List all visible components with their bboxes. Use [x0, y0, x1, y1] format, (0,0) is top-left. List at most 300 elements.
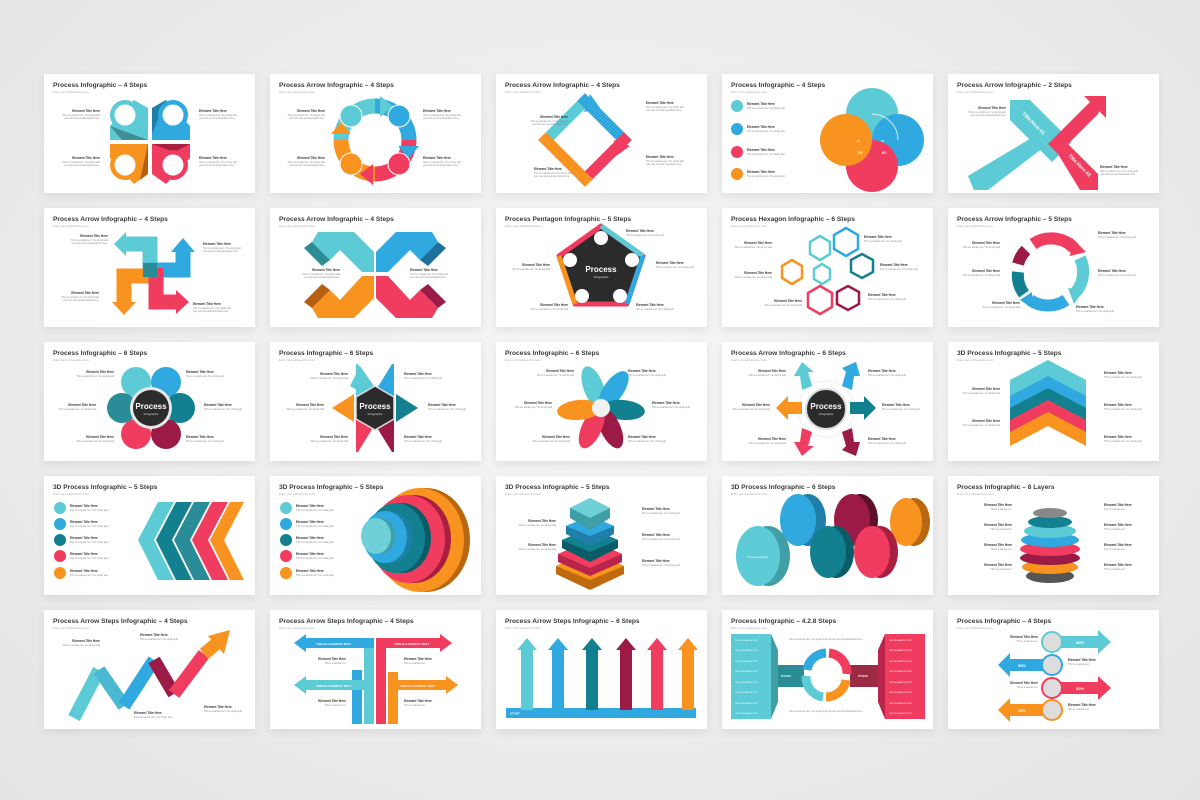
card 21: zigzag arrow steps: This is a sample text. You simply add	[134, 716, 172, 719]
card 1: Process Infographic 4 Steps: Element Title Here	[199, 109, 227, 113]
card 11: Process 6 steps circle: Element Title Here	[186, 370, 214, 374]
card 1: Process Infographic 4 Steps: your own text and description here.	[64, 117, 100, 120]
card 24: 4.2.8 steps: Process Infographic – 4.2.8 Steps	[731, 618, 837, 625]
card 12: hexagon with arrows: Element Title Here	[320, 372, 348, 376]
card 9: hexagons: This is a sample text. You simply add	[734, 246, 773, 249]
card 20: 8 layers: Process Infographic – 8 Layers	[957, 484, 1055, 491]
card 12: hexagon with arrows: This is a sample text. You simply add	[404, 440, 442, 443]
card 16: 3D chevrons list: Element Title Here	[70, 504, 98, 508]
card 4: Process Infographic 4 Steps (flower): Element Title Here	[747, 102, 775, 106]
card 11: Process 6 steps circle: Element Title Here	[68, 403, 96, 407]
card 7: X arrows	[270, 208, 481, 327]
card 2: Process Arrow Infographic 4 Steps (ring): Element Title Here	[297, 156, 325, 160]
card 20: 8 layers: This is a sample text.	[990, 568, 1012, 571]
card 24: 4.2.8 steps: TITLE02	[858, 675, 868, 678]
card 25: 4 steps percentages: 10%	[1018, 708, 1026, 713]
card 22: arrow steps 4	[270, 610, 481, 729]
card 21: zigzag arrow steps	[44, 610, 255, 729]
card 13: flower petals: Element Title Here	[524, 401, 552, 405]
card 19: 3D cylinders: This is a sample text.	[747, 556, 769, 559]
card 10: circular 5 arrows	[948, 208, 1159, 327]
card 13: flower petals: Element Title Here	[628, 435, 656, 439]
card 14: dark circle with arrows: Element Title Here	[882, 403, 910, 407]
card 13: flower petals: This is a sample text. You simply add	[628, 440, 666, 443]
card 10: circular 5 arrows: Process Arrow Infographic – 5 Steps	[957, 216, 1072, 223]
card 8: pentagon: Element Title Here	[522, 263, 550, 267]
card 12: hexagon with arrows: Element Title Here	[404, 372, 432, 376]
card 5: Process Arrow Infographic 2 Steps: Title Here #2	[1067, 153, 1092, 179]
card 7: X arrows: your own text and description here.	[410, 276, 446, 279]
card 14: dark circle with arrows: Process	[810, 402, 842, 411]
card 15: 3D stacked chevrons: This is a sample text. You simply add	[1104, 376, 1142, 379]
card 1: Process Infographic 4 Steps: Element Title Here	[72, 109, 100, 113]
card 16: 3D chevrons list: 3D Process Infographic – 5 Steps	[53, 484, 158, 491]
card 3: Process Arrow Infographic 4 Steps (diamond): your own text and description here.	[534, 175, 570, 178]
card 24: 4.2.8 steps: THIS IS A SAMPLE TEXT	[889, 649, 913, 652]
card 22: arrow steps 4: This is a sample text.	[324, 704, 346, 707]
card 15: 3D stacked chevrons: This is a sample text. You simply add	[962, 392, 1001, 395]
card 18: stacked squares 3D: 3D Process Infographic – 5 Steps	[505, 484, 610, 491]
card 11: Process 6 steps circle	[44, 342, 255, 461]
card 20: 8 layers: Element Title Here	[1104, 563, 1132, 567]
card 3: Process Arrow Infographic 4 Steps (diamond): Element Title Here	[646, 155, 674, 159]
card 14: dark circle with arrows	[722, 342, 933, 461]
card 10: circular 5 arrows: This is a sample text. You simply add	[1098, 236, 1136, 239]
card 2: Process Arrow Infographic 4 Steps (ring): Enter your subhead line here	[279, 90, 315, 94]
card 11: Process 6 steps circle: This is a sample text. You simply add	[186, 375, 224, 378]
card 16: 3D chevrons list: This is a sample text. You simply add	[70, 541, 108, 544]
card 17: concentric 3D circles: Element Title Here	[296, 536, 324, 540]
card 10: circular 5 arrows: This is a sample text. You simply add	[962, 246, 1001, 249]
card 3: Process Arrow Infographic 4 Steps (diamond): This is a sample text. You simply add	[646, 106, 684, 109]
card 5: Process Arrow Infographic 2 Steps: This is a sample text. You simply add	[968, 111, 1007, 114]
card 1: Process Infographic 4 Steps: This is a sample text. You simply add	[199, 161, 237, 164]
card 8: pentagon: Infographic	[594, 275, 609, 279]
card 8: pentagon	[496, 208, 707, 327]
card 12: hexagon with arrows: Process	[359, 402, 391, 411]
card 1: Process Infographic 4 Steps: Element Title Here	[72, 156, 100, 160]
card 8: pentagon: Element Title Here	[626, 229, 654, 233]
card 16: 3D chevrons list: This is a sample text. You simply add	[70, 574, 108, 577]
card 12: hexagon with arrows: Element Title Here	[404, 435, 432, 439]
card 14: dark circle with arrows: Process Arrow Infographic – 6 Steps	[731, 350, 846, 357]
card 22: arrow steps 4: Process Arrow Steps Infographic – 4 Steps	[279, 618, 414, 625]
card 9: hexagons: Element Title Here	[864, 235, 892, 239]
card 13: flower petals	[496, 342, 707, 461]
card 5: Process Arrow Infographic 2 Steps: your own text and description here.	[970, 114, 1006, 117]
card 22: arrow steps 4: THIS IS A SAMPLE TEXT	[316, 642, 351, 646]
card 14: dark circle with arrows: This is a sample text. You simply add	[868, 374, 906, 377]
card 7: X arrows: Process Arrow Infographic – 4 Steps	[279, 216, 394, 223]
card 24: 4.2.8 steps: THIS IS A SAMPLE TEXT	[735, 681, 759, 684]
card 25: 4 steps percentages: This is a sample text.	[1068, 663, 1090, 666]
card 6: pinwheel arrows: Element Title Here	[80, 234, 108, 238]
card 18: stacked squares 3D: This is a sample text. You simply add	[518, 548, 557, 551]
card 4: Process Infographic 4 Steps (flower)	[722, 74, 933, 193]
card 13: flower petals: This is a sample text. You simply add	[536, 374, 575, 377]
card 15: 3D stacked chevrons: Enter your subhead line here	[957, 358, 993, 362]
card 4: Process Infographic 4 Steps (flower): Process Infographic – 4 Steps	[731, 82, 826, 89]
card 2: Process Arrow Infographic 4 Steps (ring): This is a sample text. You simply add	[287, 114, 326, 117]
card 5: Process Arrow Infographic 2 Steps: Element Title Here	[978, 106, 1006, 110]
card 24: 4.2.8 steps: THIS IS A SAMPLE TEXT	[889, 712, 913, 715]
card 9: hexagons: This is a sample text. You simply add	[880, 268, 918, 271]
card 7: X arrows: Element Title Here	[410, 268, 438, 272]
card 12: hexagon with arrows: This is a sample text. You simply add	[286, 408, 325, 411]
card 19: 3D cylinders	[722, 476, 933, 595]
card 19: 3D cylinders: 3D Process Infographic – 6 Steps	[731, 484, 836, 491]
card 18: stacked squares 3D: Element Title Here	[528, 519, 556, 523]
card 17: concentric 3D circles: 3D Process Infographic – 5 Steps	[279, 484, 384, 491]
card 2: Process Arrow Infographic 4 Steps (ring)	[270, 74, 481, 193]
card 10: circular 5 arrows: Element Title Here	[1076, 305, 1104, 309]
card 18: stacked squares 3D: Enter your subhead line here	[505, 492, 541, 496]
card 17: concentric 3D circles: Enter your subhead line here	[279, 492, 315, 496]
card 2: Process Arrow Infographic 4 Steps (ring): This is a sample text. You simply add	[423, 161, 461, 164]
card 17: concentric 3D circles: Element Title Here	[296, 504, 324, 508]
card 23: vertical arrows 6: START	[510, 712, 520, 716]
card 25: 4 steps percentages: Element Title Here	[1010, 635, 1038, 639]
card 8: pentagon: This is a sample text. You simply add	[626, 234, 664, 237]
card 6: pinwheel arrows: your own text and description here.	[193, 310, 229, 313]
card 2: Process Arrow Infographic 4 Steps (ring): This is a sample text. You simply add	[423, 114, 461, 117]
card 18: stacked squares 3D: This is a sample text. You simply add	[642, 538, 680, 541]
card 24: 4.2.8 steps: THIS IS A SAMPLE TEXT	[735, 649, 759, 652]
card 6: pinwheel arrows: your own text and description here.	[63, 299, 99, 302]
card 4: Process Infographic 4 Steps (flower): 03	[858, 150, 863, 155]
card 15: 3D stacked chevrons	[948, 342, 1159, 461]
card 11: Process 6 steps circle: Element Title Here	[186, 435, 214, 439]
card 9: hexagons: Element Title Here	[744, 241, 772, 245]
card 24: 4.2.8 steps: THIS IS A SAMPLE TEXT	[889, 670, 913, 673]
card 22: arrow steps 4: Element Title Here	[404, 657, 432, 661]
card 6: pinwheel arrows: This is a sample text. You simply add	[193, 307, 231, 310]
card 24: 4.2.8 steps: THIS IS A SAMPLE TEXT	[735, 660, 759, 663]
card 22: arrow steps 4: Enter your subhead line here	[279, 626, 315, 630]
card 15: 3D stacked chevrons: Element Title Here	[972, 387, 1000, 391]
card 25: 4 steps percentages: Element Title Here	[1068, 658, 1096, 662]
card 4: Process Infographic 4 Steps (flower): This is a sample text. You simply add	[747, 175, 785, 178]
card 2: Process Arrow Infographic 4 Steps (ring): Element Title Here	[423, 109, 451, 113]
card 7: X arrows: your own text and description here.	[304, 276, 340, 279]
card 9: hexagons: This is a sample text. You simply add	[764, 304, 803, 307]
card 20: 8 layers: Element Title Here	[984, 563, 1012, 567]
card 6: pinwheel arrows: Enter your subhead line here	[53, 224, 89, 228]
card 2: Process Arrow Infographic 4 Steps (ring): This is a sample text. You simply add	[287, 161, 326, 164]
card 10: circular 5 arrows: This is a sample text. You simply add	[1098, 274, 1136, 277]
card 9: hexagons: Element Title Here	[774, 299, 802, 303]
card 25: 4 steps percentages: 80%	[1076, 640, 1084, 645]
card 24: 4.2.8 steps: THIS IS A SAMPLE TEXT	[889, 702, 913, 705]
card 13: flower petals: This is a sample text. You simply add	[628, 374, 666, 377]
card 2: Process Arrow Infographic 4 Steps (ring): Element Title Here	[423, 156, 451, 160]
card 20: 8 layers: This is a sample text.	[990, 508, 1012, 511]
card 5: Process Arrow Infographic 2 Steps: Title Here #1	[1021, 111, 1046, 137]
card 21: zigzag arrow steps: Element Title Here	[204, 705, 232, 709]
card 24: 4.2.8 steps: THIS IS A SAMPLE TEXT	[735, 670, 759, 673]
card 9: hexagons: Element Title Here	[880, 263, 908, 267]
card 17: concentric 3D circles: This is a sample text. You simply add	[296, 509, 334, 512]
card 13: flower petals: Enter your subhead line here	[505, 358, 541, 362]
card 21: zigzag arrow steps: Element Title Here	[72, 639, 100, 643]
card 15: 3D stacked chevrons: Element Title Here	[972, 419, 1000, 423]
card 24: 4.2.8 steps: This is a sample text. You simply add your own text and description here.	[789, 710, 863, 713]
card 18: stacked squares 3D: Element Title Here	[642, 507, 670, 511]
card 4: Process Infographic 4 Steps (flower): 01	[881, 139, 885, 143]
card 5: Process Arrow Infographic 2 Steps: Enter your subhead line here	[957, 90, 993, 94]
card 18: stacked squares 3D: This is a sample text. You simply add	[642, 512, 680, 515]
card 12: hexagon with arrows: Process Infographic – 6 Steps	[279, 350, 374, 357]
card 5: Process Arrow Infographic 2 Steps: Element Title Here	[1100, 165, 1128, 169]
card 24: 4.2.8 steps: THIS IS A SAMPLE TEXT	[889, 691, 913, 694]
card 2: Process Arrow Infographic 4 Steps (ring): your own text and description here.	[289, 117, 325, 120]
card 2: Process Arrow Infographic 4 Steps (ring): your own text and description here.	[289, 164, 325, 167]
card 13: flower petals: Element Title Here	[652, 401, 680, 405]
card 24: 4.2.8 steps: THIS IS A SAMPLE TEXT	[735, 691, 759, 694]
card 17: concentric 3D circles	[270, 476, 481, 595]
card 12: hexagon with arrows: Element Title Here	[296, 403, 324, 407]
card 11: Process 6 steps circle: This is a sample text. You simply add	[76, 440, 115, 443]
card 10: circular 5 arrows: This is a sample text. You simply add	[1076, 310, 1114, 313]
card 5: Process Arrow Infographic 2 Steps: Process Arrow Infographic – 2 Steps	[957, 82, 1072, 89]
card 16: 3D chevrons list	[44, 476, 255, 595]
card 11: Process 6 steps circle: Enter your subhead line here	[53, 358, 89, 362]
card 12: hexagon with arrows: Infographic	[368, 412, 383, 416]
card 15: 3D stacked chevrons: Element Title Here	[1104, 371, 1132, 375]
card 11: Process 6 steps circle: Element Title Here	[204, 403, 232, 407]
card 9: hexagons: Process Hexagon Infographic – 6 Steps	[731, 216, 855, 223]
card 18: stacked squares 3D: Element Title Here	[642, 533, 670, 537]
card 22: arrow steps 4: Element Title Here	[404, 699, 432, 703]
card 18: stacked squares 3D: Element Title Here	[528, 543, 556, 547]
card 2: Process Arrow Infographic 4 Steps (ring): Process Arrow Infographic – 4 Steps	[279, 82, 394, 89]
card 12: hexagon with arrows: This is a sample text. You simply add	[404, 377, 442, 380]
card 20: 8 layers: Element Title Here	[1104, 503, 1132, 507]
card 10: circular 5 arrows: This is a sample text. You simply add	[962, 274, 1001, 277]
card 4: Process Infographic 4 Steps (flower): Element Title Here	[747, 148, 775, 152]
card 24: 4.2.8 steps: THIS IS A SAMPLE TEXT	[889, 639, 913, 642]
card 1: Process Infographic 4 Steps: This is a sample text. You simply add	[62, 161, 101, 164]
card 24: 4.2.8 steps: THIS IS A SAMPLE TEXT	[889, 681, 913, 684]
card 14: dark circle with arrows: Element Title Here	[868, 369, 896, 373]
card 9: hexagons	[722, 208, 933, 327]
card 14: dark circle with arrows: This is a sample text. You simply add	[748, 374, 787, 377]
card 17: concentric 3D circles: This is a sample text. You simply add	[296, 525, 334, 528]
card 3: Process Arrow Infographic 4 Steps (diamond): Enter your subhead line here	[505, 90, 541, 94]
card 17: concentric 3D circles: Element Title Here	[296, 520, 324, 524]
card 20: 8 layers: This is a sample text.	[990, 548, 1012, 551]
card 4: Process Infographic 4 Steps (flower): 04	[857, 139, 861, 143]
card 22: arrow steps 4: This is a sample text.	[404, 662, 426, 665]
card 24: 4.2.8 steps: THIS IS A SAMPLE TEXT	[889, 660, 913, 663]
card 22: arrow steps 4: THIS IS A SAMPLE TEXT	[400, 684, 435, 688]
card 20: 8 layers: This is a sample text.	[1104, 548, 1126, 551]
card 22: arrow steps 4: THIS IS A SAMPLE TEXT	[316, 684, 351, 688]
card 13: flower petals: Element Title Here	[542, 435, 570, 439]
card 14: dark circle with arrows: This is a sample text. You simply add	[748, 442, 787, 445]
card 6: pinwheel arrows: This is a sample text. You simply add	[203, 247, 241, 250]
card 13: flower petals: Element Title Here	[628, 369, 656, 373]
card 16: 3D chevrons list: Element Title Here	[70, 569, 98, 573]
card 21: zigzag arrow steps: Enter your subhead line here	[53, 626, 89, 630]
card 17: concentric 3D circles: This is a sample text. You simply add	[296, 574, 334, 577]
card 7: X arrows: Enter your subhead line here	[279, 224, 315, 228]
card 2: Process Arrow Infographic 4 Steps (ring): your own text and description here.	[423, 117, 459, 120]
card 1: Process Infographic 4 Steps: your own text and description here.	[64, 164, 100, 167]
card 25: 4 steps percentages: This is a sample text.	[1016, 640, 1038, 643]
card 25: 4 steps percentages: Element Title Here	[1010, 681, 1038, 685]
card 7: X arrows: This is a sample text. You simply add	[410, 273, 448, 276]
card 1: Process Infographic 4 Steps: Element Title Here	[199, 156, 227, 160]
card 22: arrow steps 4: THIS IS A SAMPLE TEXT	[394, 642, 429, 646]
card 3: Process Arrow Infographic 4 Steps (diamond)	[496, 74, 707, 193]
card 11: Process 6 steps circle: Process	[135, 402, 167, 411]
card 6: pinwheel arrows: This is a sample text. You simply add	[70, 239, 109, 242]
card 5: Process Arrow Infographic 2 Steps: This is a sample text. You simply add	[1100, 170, 1138, 173]
card 11: Process 6 steps circle: Element Title Here	[86, 370, 114, 374]
card 10: circular 5 arrows: Element Title Here	[972, 269, 1000, 273]
card 25: 4 steps percentages: This is a sample text.	[1068, 708, 1090, 711]
card 6: pinwheel arrows: Element Title Here	[193, 302, 221, 306]
card 14: dark circle with arrows: This is a sample text. You simply add	[868, 442, 906, 445]
card 20: 8 layers: Element Title Here	[1104, 523, 1132, 527]
card 4: Process Infographic 4 Steps (flower): This is a sample text. You simply add	[747, 130, 785, 133]
card 21: zigzag arrow steps: Element Title Here	[134, 711, 162, 715]
card 8: pentagon: This is a sample text. You simply add	[656, 266, 694, 269]
card 15: 3D stacked chevrons: Element Title Here	[1104, 435, 1132, 439]
card 1: Process Infographic 4 Steps: This is a sample text. You simply add	[199, 114, 237, 117]
card 21: zigzag arrow steps: Element Title Here	[140, 633, 168, 637]
card 9: hexagons: This is a sample text. You simply add	[734, 276, 773, 279]
card 20: 8 layers: Element Title Here	[1104, 543, 1132, 547]
card 20: 8 layers: Element Title Here	[984, 503, 1012, 507]
card 14: dark circle with arrows: Infographic	[819, 412, 834, 416]
card 8: pentagon: Element Title Here	[656, 261, 684, 265]
card 16: 3D chevrons list: Element Title Here	[70, 520, 98, 524]
card 12: hexagon with arrows	[270, 342, 481, 461]
card 8: pentagon: Process	[585, 265, 617, 274]
card 24: 4.2.8 steps: THIS IS A SAMPLE TEXT	[735, 712, 759, 715]
card 20: 8 layers: This is a sample text.	[1104, 568, 1126, 571]
card 17: concentric 3D circles: Element Title Here	[296, 552, 324, 556]
card 13: flower petals: This is a sample text. You simply add	[532, 440, 571, 443]
card 20: 8 layers: This is a sample text.	[990, 528, 1012, 531]
card 16: 3D chevrons list: Enter your subhead line here	[53, 492, 89, 496]
card 17: concentric 3D circles: Element Title Here	[296, 569, 324, 573]
card 3: Process Arrow Infographic 4 Steps (diamond): Element Title Here	[534, 167, 562, 171]
card 10: circular 5 arrows: Element Title Here	[1098, 269, 1126, 273]
card 21: zigzag arrow steps: This is a sample text. You simply add	[140, 638, 178, 641]
card 4: Process Infographic 4 Steps (flower): This is a sample text. You simply add	[747, 107, 785, 110]
card 3: Process Arrow Infographic 4 Steps (diamond): Element Title Here	[646, 101, 674, 105]
card 3: Process Arrow Infographic 4 Steps (diamond): your own text and description here.	[532, 123, 568, 126]
card 20: 8 layers: This is a sample text.	[1104, 508, 1126, 511]
card 16: 3D chevrons list: This is a sample text. You simply add	[70, 557, 108, 560]
card 9: hexagons: Element Title Here	[744, 271, 772, 275]
card 4: Process Infographic 4 Steps (flower): 02	[882, 150, 887, 155]
card 8: pentagon: Element Title Here	[636, 303, 664, 307]
card 25: 4 steps percentages: Process Infographic – 4 Steps	[957, 618, 1052, 625]
card 14: dark circle with arrows: Element Title Here	[868, 437, 896, 441]
card 8: pentagon: Enter your subhead line here	[505, 224, 541, 228]
card 10: circular 5 arrows: Element Title Here	[972, 241, 1000, 245]
card 11: Process 6 steps circle: This is a sample text. You simply add	[186, 440, 224, 443]
card 15: 3D stacked chevrons: This is a sample text. You simply add	[962, 424, 1001, 427]
card 23: vertical arrows 6: Enter your subhead line here	[505, 626, 541, 630]
card 12: hexagon with arrows: This is a sample text. You simply add	[428, 408, 466, 411]
card 22: arrow steps 4: Element Title Here	[318, 657, 346, 661]
card 6: pinwheel arrows: Process Arrow Infographic – 4 Steps	[53, 216, 168, 223]
card 6: pinwheel arrows: Element Title Here	[71, 291, 99, 295]
card 16: 3D chevrons list: This is a sample text. You simply add	[70, 525, 108, 528]
card 8: pentagon: This is a sample text. You simply add	[512, 268, 551, 271]
card 19: 3D cylinders: Enter your subhead line here	[731, 492, 767, 496]
card 11: Process 6 steps circle: Infographic	[144, 412, 159, 416]
card 22: arrow steps 4: This is a sample text.	[404, 704, 426, 707]
card 1: Process Infographic 4 Steps: Enter your subhead line here	[53, 90, 89, 94]
card 24: 4.2.8 steps: This is a sample text. You simply add your own text and description here.	[789, 638, 863, 641]
card 17: concentric 3D circles: This is a sample text. You simply add	[296, 541, 334, 544]
card 24: 4.2.8 steps	[722, 610, 933, 729]
card 3: Process Arrow Infographic 4 Steps (diamond): Process Arrow Infographic – 4 Steps	[505, 82, 620, 89]
card 1: Process Infographic 4 Steps: your own text and description here.	[199, 164, 235, 167]
card 8: pentagon: Process Pentagon Infographic – 5 Steps	[505, 216, 631, 223]
card 1: Process Infographic 4 Steps: This is a sample text. You simply add	[62, 114, 101, 117]
card 15: 3D stacked chevrons: This is a sample text. You simply add	[1104, 408, 1142, 411]
card 4: Process Infographic 4 Steps (flower): Enter your subhead line here	[731, 90, 767, 94]
card 24: 4.2.8 steps: THIS IS A SAMPLE TEXT	[735, 639, 759, 642]
card 21: zigzag arrow steps: This is a sample text. You simply add	[204, 710, 242, 713]
card 6: pinwheel arrows: This is a sample text. You simply add	[61, 296, 100, 299]
card 25: 4 steps percentages: 30%	[1076, 686, 1084, 691]
card 14: dark circle with arrows: This is a sample text. You simply add	[732, 408, 771, 411]
card 6: pinwheel arrows: your own text and description here.	[72, 242, 108, 245]
card 13: flower petals: This is a sample text. You simply add	[652, 406, 690, 409]
card 16: 3D chevrons list: Element Title Here	[70, 552, 98, 556]
card 3: Process Arrow Infographic 4 Steps (diamond): This is a sample text. You simply add	[530, 120, 569, 123]
card 12: hexagon with arrows: Enter your subhead line here	[279, 358, 315, 362]
card 23: vertical arrows 6	[496, 610, 707, 729]
card 25: 4 steps percentages: Element Title Here	[1068, 703, 1096, 707]
card 25: 4 steps percentages: This is a sample text.	[1016, 686, 1038, 689]
card 3: Process Arrow Infographic 4 Steps (diamond): This is a sample text. You simply add	[646, 160, 684, 163]
card 20: 8 layers: Element Title Here	[984, 523, 1012, 527]
card 11: Process 6 steps circle: This is a sample text. You simply add	[58, 408, 97, 411]
card 25: 4 steps percentages: 50%	[1018, 663, 1026, 668]
card 12: hexagon with arrows: Element Title Here	[320, 435, 348, 439]
card 24: 4.2.8 steps: THIS IS A SAMPLE TEXT	[735, 702, 759, 705]
card 24: 4.2.8 steps: TITLE01	[781, 675, 791, 678]
card 20: 8 layers: Enter your subhead line here	[957, 492, 993, 496]
card 4: Process Infographic 4 Steps (flower): This is a sample text. You simply add	[747, 153, 785, 156]
card 11: Process 6 steps circle: This is a sample text. You simply add	[204, 408, 242, 411]
card 9: hexagons: This is a sample text. You simply add	[868, 298, 906, 301]
card 1: Process Infographic 4 Steps	[44, 74, 255, 193]
card 3: Process Arrow Infographic 4 Steps (diamond): This is a sample text. You simply add	[534, 172, 572, 175]
card 12: hexagon with arrows: Element Title Here	[428, 403, 456, 407]
card 11: Process 6 steps circle: Element Title Here	[86, 435, 114, 439]
card 16: 3D chevrons list: Element Title Here	[70, 536, 98, 540]
card 25: 4 steps percentages: Enter your subhead line here	[957, 626, 993, 630]
card 18: stacked squares 3D: This is a sample text. You simply add	[642, 564, 680, 567]
card 5: Process Arrow Infographic 2 Steps	[948, 74, 1159, 193]
card 4: Process Infographic 4 Steps (flower): Element Title Here	[747, 170, 775, 174]
card 24: 4.2.8 steps: Enter your subhead line here	[731, 626, 767, 630]
card 9: hexagons: Enter your subhead line here	[731, 224, 767, 228]
card 10: circular 5 arrows: Element Title Here	[992, 301, 1020, 305]
card 1: Process Infographic 4 Steps: Process Infographic – 4 Steps	[53, 82, 148, 89]
card 21: zigzag arrow steps: This is a sample text. You simply add	[62, 644, 101, 647]
